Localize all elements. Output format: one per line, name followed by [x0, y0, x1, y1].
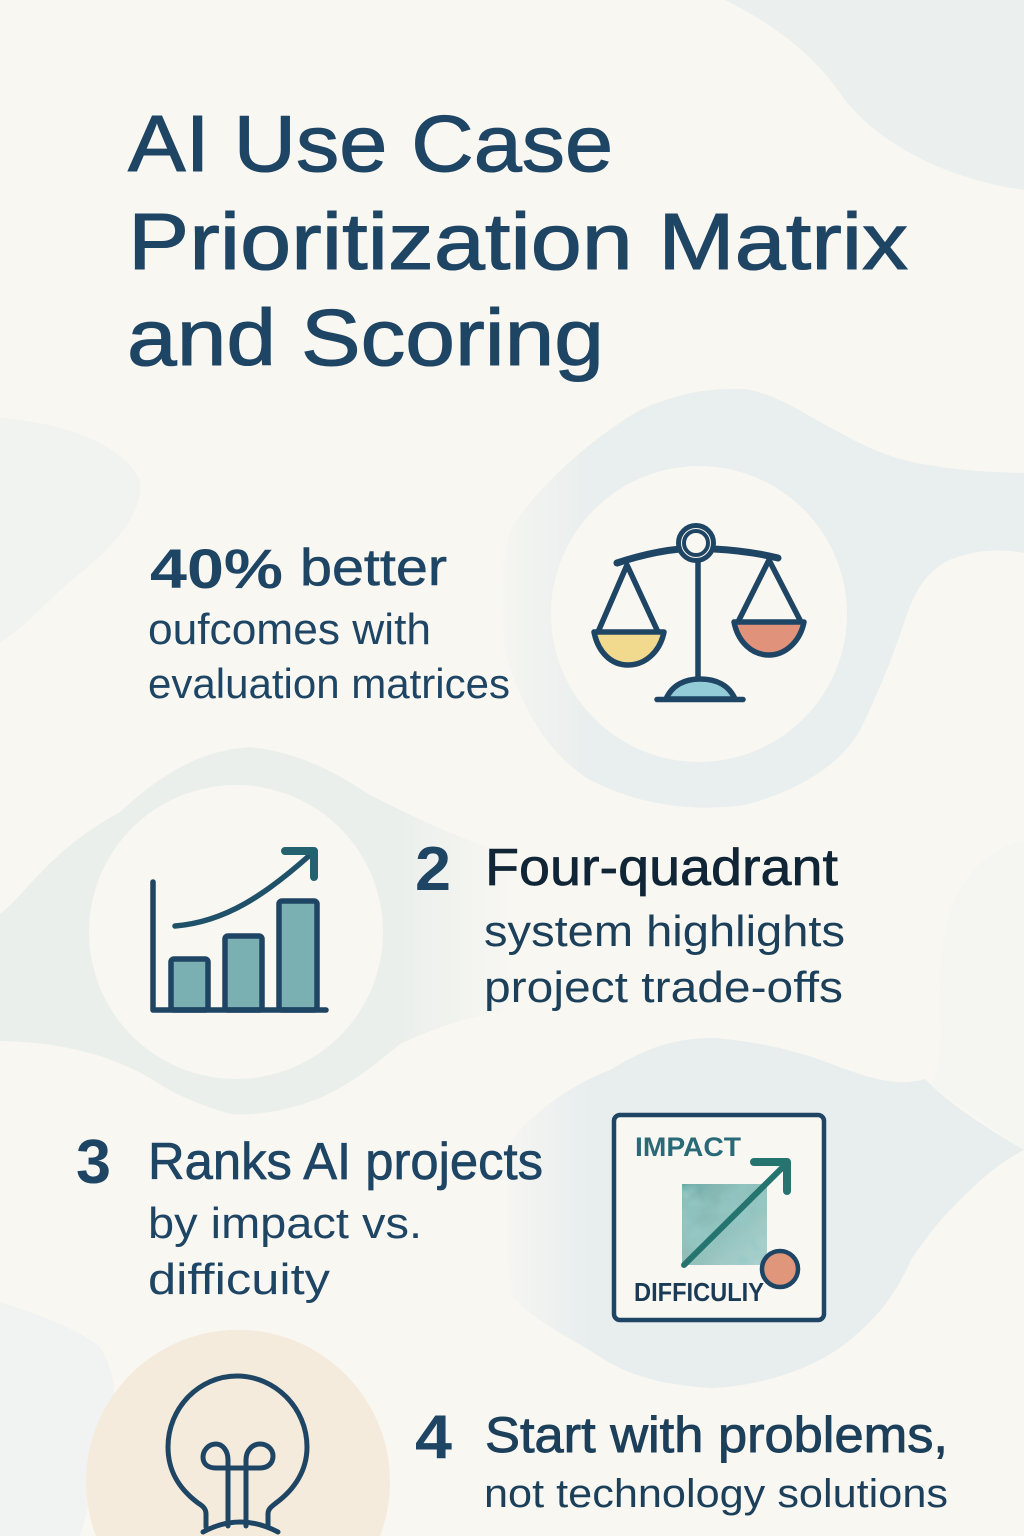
- icon: balance scale: [551, 466, 847, 762]
- text block: start with problems: [484, 1407, 948, 1516]
- panel: 40% better outcomes: [148, 466, 847, 762]
- icon: impact difficulty matrix: DIFFICULIY: [634, 1277, 764, 1307]
- text block: four-quadrant system: [484, 839, 845, 1012]
- number 2: 2: [415, 835, 451, 904]
- text block: stat one: better: [300, 539, 447, 597]
- text block: four-quadrant system: project trade-offs: [484, 963, 843, 1012]
- title: AI Use Case: [128, 99, 613, 188]
- title: and Scoring: [127, 293, 604, 382]
- text block: start with problems: not technology solutions: [484, 1472, 948, 1516]
- text block: ranks projects: by impact vs.: [148, 1199, 422, 1248]
- text block: ranks projects: difficuity: [148, 1255, 330, 1304]
- text block: four-quadrant system: Four-quadrant: [485, 839, 839, 897]
- panel: ranks AI projects: [76, 1115, 824, 1320]
- text block: four-quadrant system: system highlights: [484, 907, 845, 956]
- title: [127, 99, 908, 382]
- text block: stat one: 40%: [150, 537, 283, 600]
- text block: ranks projects: Ranks AI projects: [148, 1133, 543, 1191]
- text block: start with problems: Start with problems,: [485, 1407, 948, 1463]
- panel: start with problems: [86, 1330, 948, 1536]
- title: Prioritization Matrix: [128, 197, 908, 286]
- icon: impact difficulty matrix: [614, 1115, 824, 1320]
- number 4: 4: [415, 1403, 453, 1472]
- number 3: 3: [76, 1128, 111, 1197]
- icon: impact difficulty matrix: IMPACT: [635, 1132, 742, 1162]
- text block: ranks projects: [148, 1133, 543, 1304]
- panel: four-quadrant: [89, 785, 845, 1079]
- text block: stat one: [148, 537, 510, 707]
- icon: bar chart with rising arrow: [89, 785, 383, 1079]
- text block: stat one: oufcomes with: [148, 605, 431, 654]
- text block: stat one: evaluation matrices: [148, 660, 510, 707]
- icon: light bulb: [86, 1330, 390, 1536]
